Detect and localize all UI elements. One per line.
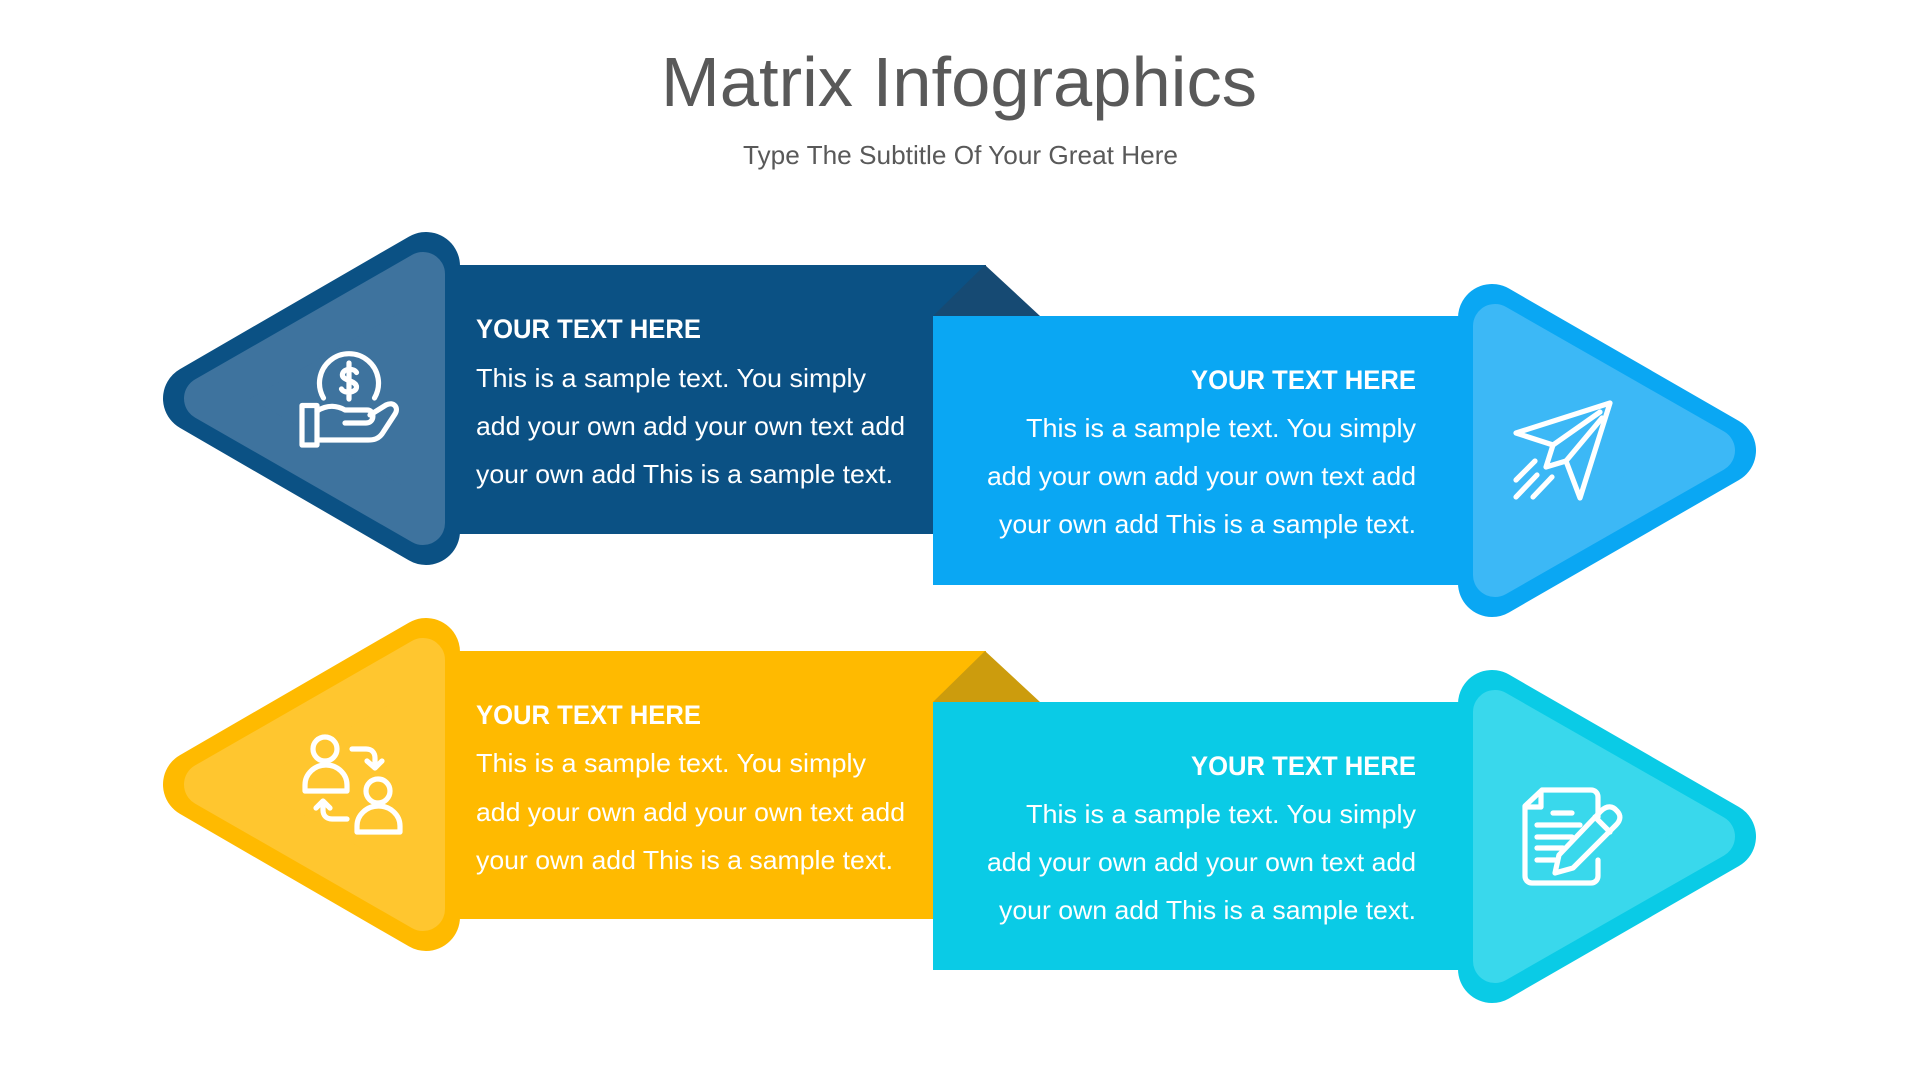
navy heading: YOUR TEXT HERE (476, 314, 701, 344)
cyan ribbon (933, 702, 1478, 970)
panel: cyan right arrow (933, 702, 1722, 970)
blue body text (987, 413, 1416, 539)
navy body text: This is a sample text. You simply (476, 363, 866, 393)
navy triangle (197, 266, 426, 531)
cyan body text: This is a sample text. You simply (1026, 799, 1416, 829)
yellow body text: add your own add your own text add (476, 797, 905, 827)
yellow ribbon (440, 651, 986, 919)
panel: yellow left arrow (197, 651, 1040, 919)
blue body text: your own add This is a sample text. (999, 509, 1416, 539)
yellow heading: YOUR TEXT HERE (476, 700, 701, 730)
yellow inner triangle (206, 660, 423, 909)
subtitle: Type The Subtitle Of Your Great Here (743, 140, 1178, 170)
cyan body text (987, 799, 1416, 925)
navy ribbon (440, 265, 986, 534)
yellow fold (933, 651, 1040, 702)
navy body text (476, 363, 905, 489)
yellow triangle (197, 652, 426, 917)
panel: sky blue right arrow (933, 316, 1722, 585)
yellow body text: This is a sample text. You simply (476, 748, 866, 778)
icon: paper plane (1516, 403, 1610, 498)
icon: hand holding coin (302, 354, 396, 445)
cyan body text: your own add This is a sample text. (999, 895, 1416, 925)
blue inner triangle (1495, 326, 1713, 575)
navy body text: add your own add your own text add (476, 411, 905, 441)
blue heading: YOUR TEXT HERE (1191, 365, 1416, 395)
cyan triangle (1492, 704, 1722, 969)
icon: document and pencil (1525, 790, 1620, 883)
navy fold (933, 265, 1040, 316)
cyan heading: YOUR TEXT HERE (1191, 751, 1416, 781)
cyan inner triangle (1495, 712, 1713, 961)
icon: people exchange (305, 737, 400, 832)
title: Matrix Infographics (661, 43, 1257, 121)
blue ribbon (933, 316, 1478, 585)
navy inner triangle (206, 274, 423, 523)
blue body text: This is a sample text. You simply (1026, 413, 1416, 443)
blue body text: add your own add your own text add (987, 461, 1416, 491)
blue triangle (1492, 318, 1722, 583)
cyan body text: add your own add your own text add (987, 847, 1416, 877)
panel: navy left arrow (197, 265, 1040, 534)
navy body text: your own add This is a sample text. (476, 459, 893, 489)
yellow body text: your own add This is a sample text. (476, 845, 893, 875)
yellow body text (476, 748, 905, 875)
